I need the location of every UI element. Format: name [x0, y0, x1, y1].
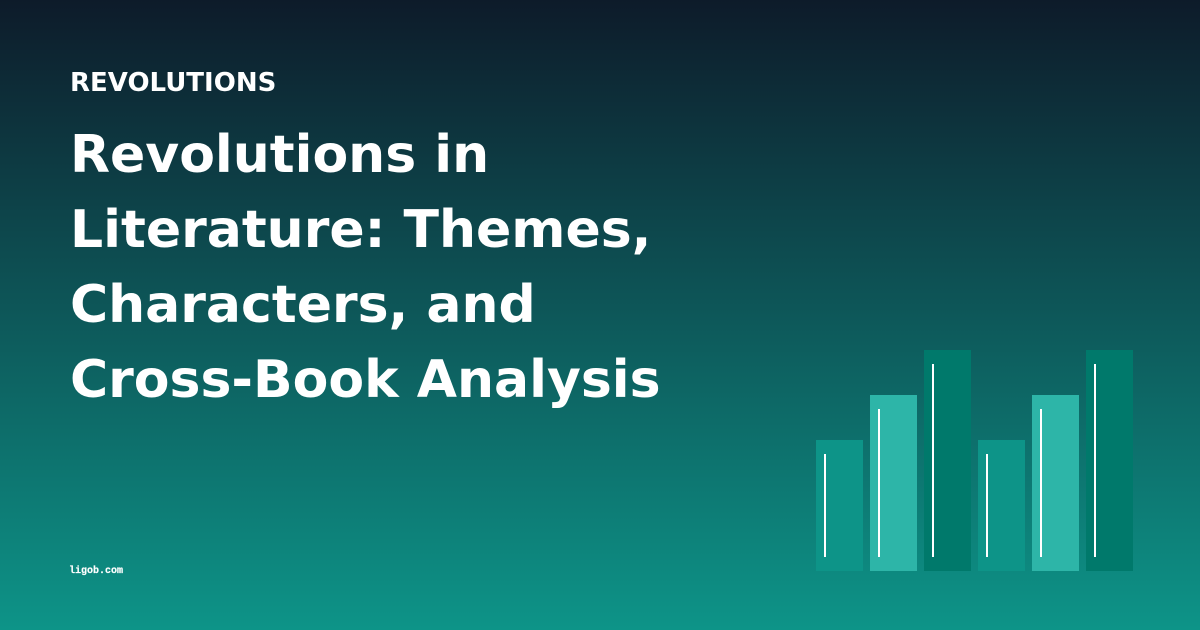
bar 1 — [816, 440, 863, 571]
bar 2 — [870, 395, 917, 571]
site footer text: ligob.com — [69, 566, 123, 577]
title — [70, 125, 661, 410]
eyebrow label: REVOLUTIONS — [70, 68, 276, 98]
title: Revolutions in — [70, 125, 489, 185]
title: Cross-Book Analysis — [70, 350, 661, 410]
bar chart illustration — [816, 350, 1133, 571]
bar 4 — [978, 440, 1025, 571]
title: Characters, and — [70, 275, 536, 335]
bar 3 — [924, 350, 971, 571]
title: Literature: Themes, — [70, 200, 651, 260]
bar 6 — [1086, 350, 1133, 571]
bar 5 — [1032, 395, 1079, 571]
